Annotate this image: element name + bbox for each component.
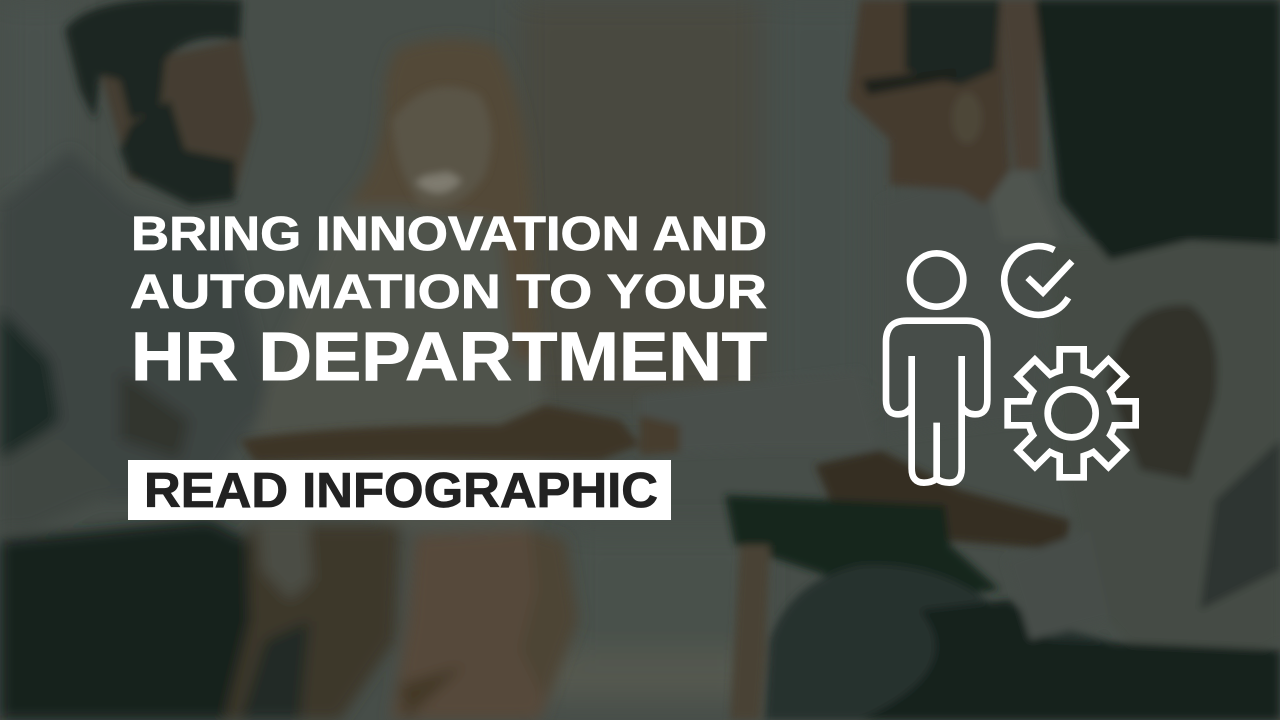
woman top: [255, 200, 545, 530]
title: BRING INNOVATION AND: [131, 208, 767, 261]
right man: [880, 170, 1050, 440]
icon: check mark: [1004, 246, 1072, 315]
handshake arm: [240, 405, 640, 462]
woman trousers: [390, 530, 578, 720]
man trousers, dark: [0, 520, 250, 720]
hand on knee: [258, 520, 312, 600]
cuff: [1005, 530, 1110, 640]
man head: [100, 40, 255, 195]
man shirt: [0, 150, 270, 530]
woman face: [392, 87, 491, 207]
title: AUTOMATION TO YOUR: [130, 266, 767, 319]
right woman trousers: [765, 565, 1280, 720]
woman face strip: [1000, 0, 1040, 170]
icon: gear: [1008, 349, 1136, 477]
right woman blouse: [1050, 240, 1280, 700]
notebook: [725, 495, 1000, 600]
pen, hand and forearm: [815, 450, 1070, 550]
icon: person: [886, 253, 987, 483]
tan trouser leg: [225, 525, 400, 720]
sleeve: [640, 370, 880, 455]
woman hair: [345, 39, 540, 360]
button: read infographic: READ INFOGRAPHIC: [144, 464, 658, 518]
title: HR DEPARTMENT: [131, 318, 767, 395]
right woman hair: [1035, 0, 1280, 260]
